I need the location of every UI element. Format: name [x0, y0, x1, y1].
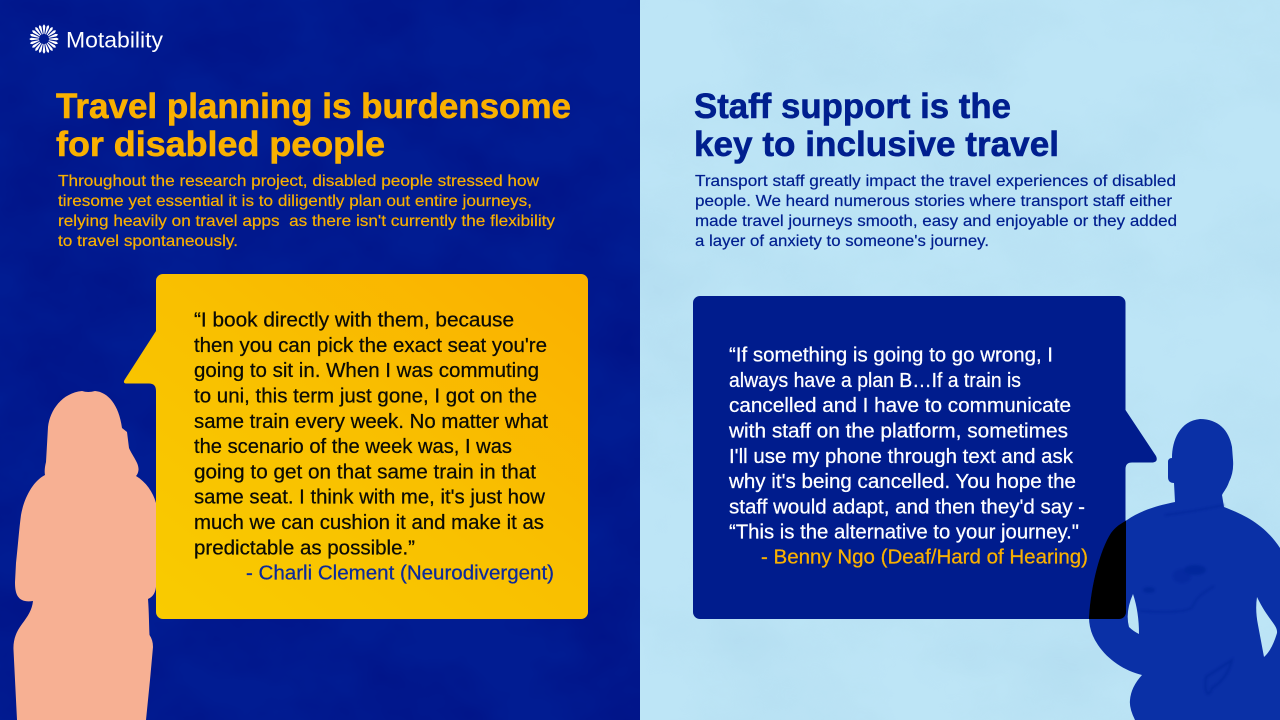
silhouette overlap: black where man crosses the bubble: [1089, 520, 1126, 619]
text block: right panel introduction: [695, 173, 1177, 250]
text block: left panel introduction: relying heavily on travel apps as there isn't currently the flexibility: [58, 213, 555, 230]
logo: Motability: [30, 24, 163, 54]
heading: right panel title: key to inclusive travel: [694, 125, 1059, 164]
quote: Benny Ngo: “If something is going to go wrong, I: [729, 344, 1053, 366]
icon: white flower: [30, 24, 58, 54]
text block: left panel introduction: Throughout the research project, disabled people stressed how: [58, 173, 539, 190]
quote: Charli Clement: then you can pick the exact seat you're: [194, 335, 547, 357]
heading: right panel title: [694, 87, 1059, 164]
text block: right panel introduction: a layer of anxiety to someone's journey.: [695, 233, 989, 250]
text block: right panel introduction: people. We heard numerous stories where transport staff either: [695, 193, 1173, 210]
quote: Charli Clement: going to get on that same train in that: [194, 462, 536, 484]
quote: Benny Ngo: staff would adapt, and then they'd say -: [729, 496, 1085, 518]
heading: right panel title: Staff support is the: [694, 87, 1011, 126]
panel: dark blue left background: [0, 0, 640, 720]
quote: Benny Ngo: with staff on the platform, sometimes: [728, 420, 1068, 442]
illustration: peach silhouette of a woman: [13, 391, 156, 720]
quote: Benny Ngo: “This is the alternative to your journey.": [729, 522, 1079, 544]
quote attribution: Benny Ngo: - Benny Ngo (Deaf/Hard of Hearing): [761, 546, 1088, 568]
heading: left panel title: Travel planning is burdensome: [56, 87, 571, 126]
quote: Charli Clement: going to sit in. When I was commuting: [194, 360, 539, 382]
quote attribution: Charli Clement: - Charli Clement (Neurodivergent): [246, 562, 554, 584]
silhouette shading: darker watercolour veins: [1140, 505, 1232, 694]
quote: Charli Clement: same seat. I think with me, it's just how: [194, 486, 546, 508]
quote: Benny Ngo: why it's being cancelled. You hope the: [728, 471, 1076, 493]
quote: Charli Clement: predictable as possible.”: [194, 538, 415, 560]
speech bubble: navy quote panel: [693, 296, 1157, 619]
heading: left panel title: [56, 87, 571, 164]
heading: left panel title: for disabled people: [56, 125, 385, 164]
illustration: blue silhouette of a man: [1089, 419, 1280, 720]
panel: light blue right background: [640, 0, 1280, 720]
quote: Charli Clement: the scenario of the week was, I was: [194, 436, 512, 458]
text block: right panel introduction: made travel journeys smooth, easy and enjoyable or they added: [695, 213, 1177, 230]
quote: Benny Ngo: I'll use my phone through text and ask: [729, 446, 1074, 468]
speech bubble: yellow quote panel: [124, 274, 588, 619]
text block: left panel introduction: [58, 173, 555, 250]
text block: left panel introduction: to travel spontaneously.: [58, 233, 238, 250]
quote: Charli Clement: [194, 310, 554, 584]
quote: Benny Ngo: cancelled and I have to communicate: [729, 395, 1071, 417]
quote: Charli Clement: “I book directly with them, because: [194, 310, 514, 332]
quote: Charli Clement: to uni, this term just gone, I got on the: [194, 386, 537, 408]
text block: left panel introduction: tiresome yet essential it is to diligently plan out entire journeys,: [58, 193, 532, 210]
quote: Charli Clement: much we can cushion it and make it as: [194, 512, 544, 534]
text block: right panel introduction: Transport staff greatly impact the travel experiences of disabled: [695, 173, 1176, 190]
quote: Charli Clement: same train every week. No matter what: [194, 411, 548, 433]
logo wordmark: Motability: [66, 28, 163, 52]
quote: Benny Ngo: always have a plan B…If a train is: [729, 370, 1021, 392]
quote: Benny Ngo: [728, 344, 1088, 568]
